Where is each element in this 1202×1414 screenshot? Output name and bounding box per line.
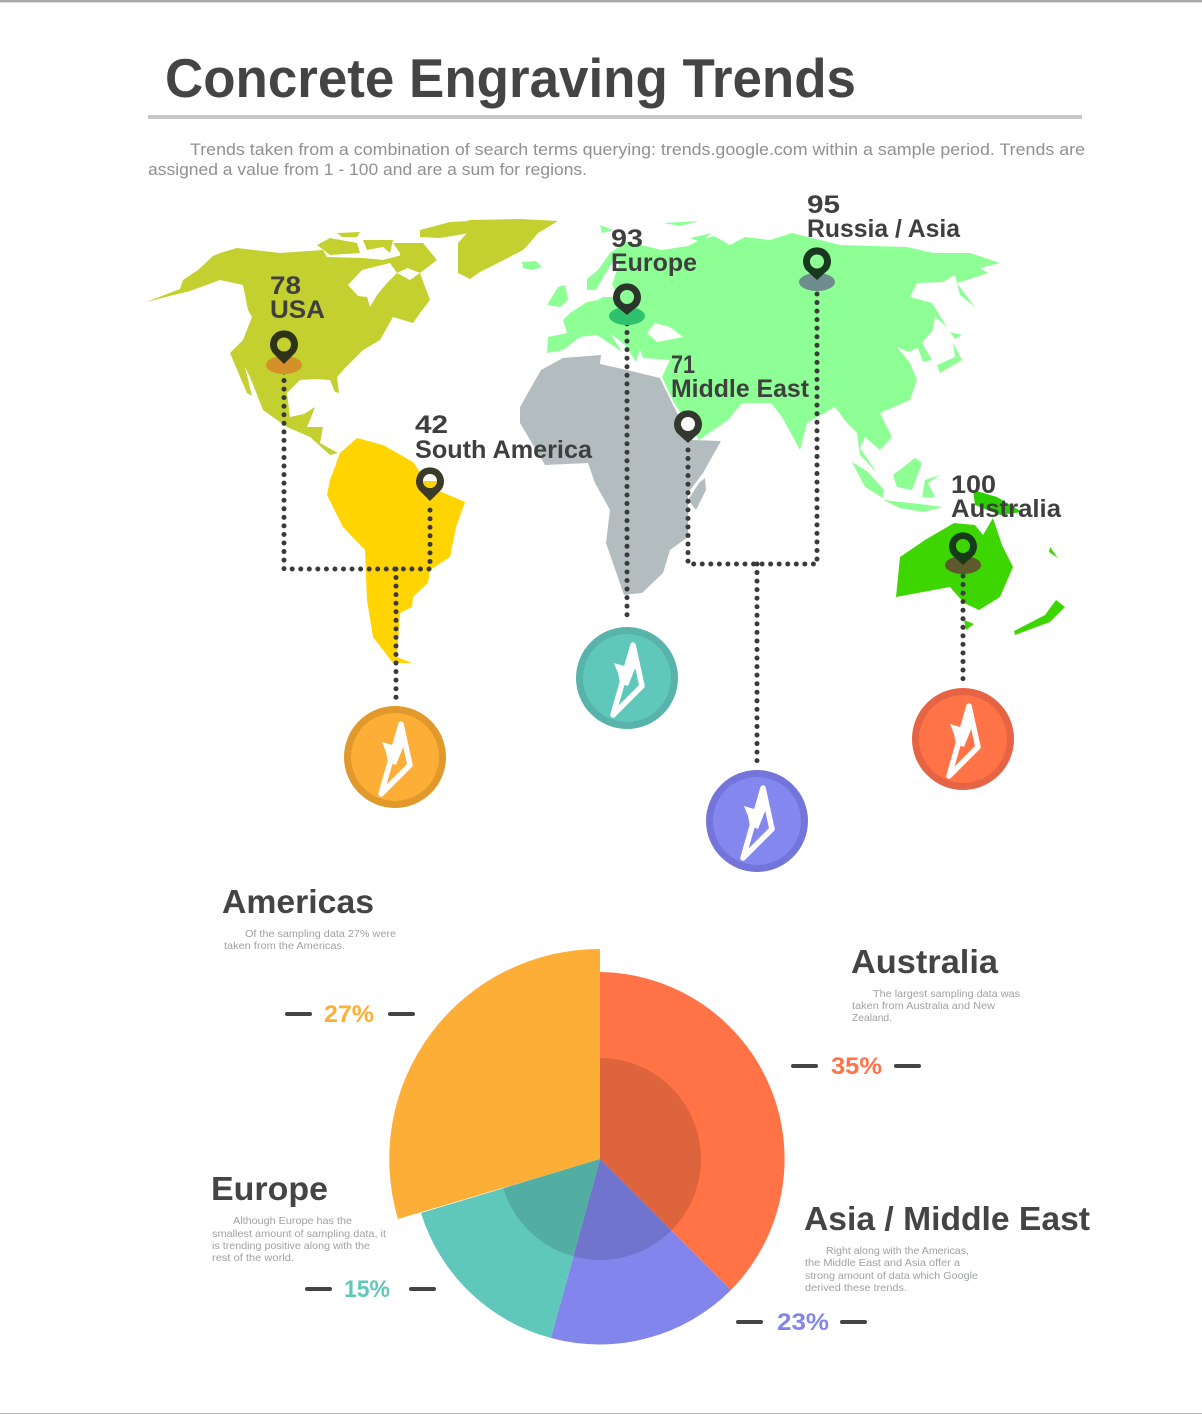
text block: Americas [222,883,396,952]
text block: Asia / Middle East: strong amount of data which Google [805,1270,978,1282]
text block: Europe: is trending positive along with the [212,1240,370,1252]
map label: Australia: 100 [951,471,996,499]
text block: Europe: Europe [211,1170,328,1207]
percent label: 15%: 15% [344,1276,390,1303]
icon badge: purple [706,770,808,872]
dotted connector: Americas [284,372,430,700]
text block: Australia: taken from Australia and New [852,1000,995,1012]
text block: Asia / Middle East: derived these trends. [805,1282,907,1294]
text block: Americas: Of the sampling data 27% were [245,928,396,940]
map label: Russia / Asia [807,191,961,243]
percent label: 23% [738,1309,865,1336]
text block: Americas: taken from the Americas. [224,940,345,952]
intro text: Trends taken from a combination of search terms querying: trends.google.com within a sample period. Trends are [190,140,1085,159]
title: Concrete Engraving Trends [165,47,856,109]
text block: Europe: rest of the world. [212,1252,294,1264]
text block: Asia / Middle East: the Middle East and Asia offer a [805,1257,960,1269]
percent label: 23%: 23% [777,1309,829,1336]
intro text [148,140,1085,179]
text block: Europe [211,1170,386,1264]
percent label: 27% [287,1001,413,1028]
map label: Russia / Asia: 95 [807,191,840,219]
map region: North America [146,219,558,455]
map region: Eurasia [522,221,1000,512]
text block: Asia / Middle East [804,1200,1090,1294]
pie chart [389,949,785,1344]
percent label: 35%: 35% [831,1053,882,1080]
text block: Europe: Although Europe has the [233,1215,352,1227]
text block: Americas: Americas [222,883,374,920]
world map [146,219,1065,663]
slice: Australia 35% [600,972,785,1290]
text block: Europe: smallest amount of sampling data, it [212,1228,386,1240]
map label: Russia / Asia: Russia / Asia [807,215,961,243]
map label: Middle East [671,351,810,403]
text block: Australia: Australia [851,943,999,980]
text block: Asia / Middle East: Asia / Middle East [804,1200,1090,1237]
intro text: assigned a value from 1 - 100 and are a sum for regions. [148,160,587,179]
dotted connector: Middle East and Asia [688,290,817,765]
icon badge: red [912,688,1014,790]
percent label: 27%: 27% [324,1001,374,1028]
map label: USA [270,272,325,324]
dotted connector: Australia [960,576,966,680]
map region: South America [327,438,465,663]
dotted connector: Europe [624,324,630,618]
map label: Australia [951,471,1062,523]
slice: Asia / Middle East 23% [551,1159,731,1344]
slice: Americas 27% [389,949,600,1219]
text block: Asia / Middle East: Right along with the Americas, [826,1245,969,1257]
text block: Australia: The largest sampling data was [873,988,1020,1000]
pin: USA [266,330,302,374]
map label: USA: USA [270,296,325,324]
map label: Europe [611,225,697,277]
text block: Australia [851,943,1020,1024]
map label: USA: 78 [270,272,301,300]
text block: Australia: Zealand. [852,1012,892,1024]
map label: Europe: 93 [611,225,643,253]
pie inner ring [499,1058,701,1260]
map label: Middle East: 71 [671,351,695,379]
map label: South America: 42 [415,411,448,439]
map label: South America [415,411,593,464]
pin: Europe [609,283,645,325]
map region: Africa [520,355,721,595]
pin: Australia [945,532,981,574]
pin: Middle East [674,410,702,443]
map region: Oceania [896,490,1065,635]
percent label: 35% [793,1053,919,1080]
pin: South America [416,467,444,501]
icon badge: orange [344,706,446,808]
percent label: 15% [307,1276,434,1303]
icon badge: teal [576,627,678,729]
slice: Europe 15% [421,1159,600,1338]
map label: South America: South America [415,436,593,464]
pin: Russia / Asia [799,247,835,291]
map label: Middle East: Middle East [671,375,810,403]
map label: Europe: Europe [611,249,697,277]
map label: Australia: Australia [951,495,1062,523]
